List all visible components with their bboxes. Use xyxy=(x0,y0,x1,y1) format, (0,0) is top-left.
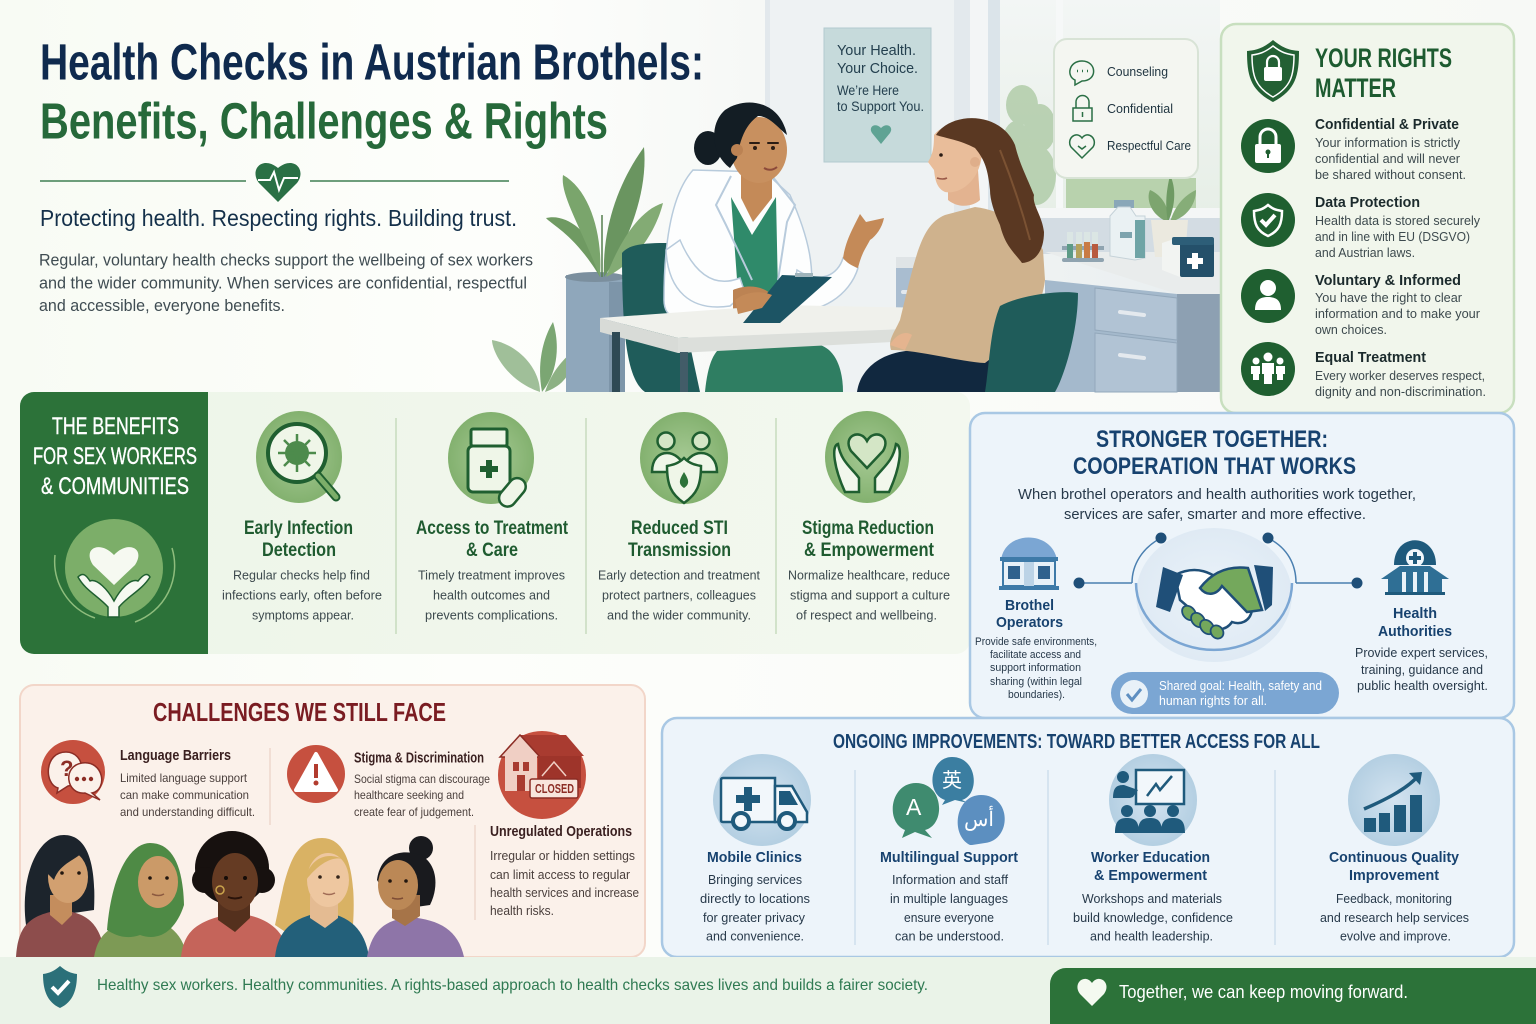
challenge: language barriers: Limited language support xyxy=(120,771,248,785)
challenge: language barriers: Language Barriers xyxy=(120,747,231,764)
challenge: unregulated operations: Unregulated Operations xyxy=(490,823,632,840)
closing banner: Together, we can keep moving forward. xyxy=(1119,982,1408,1002)
footer message: Healthy sex workers. Healthy communities. A rights-based approach to health checks saves lives and builds a fairer society. xyxy=(97,977,928,994)
icon: speech bubbles in three languages: 英 xyxy=(942,769,962,792)
illustration: five diverse women xyxy=(16,831,464,957)
heading: ONGOING IMPROVEMENTS: TOWARD BETTER ACCESS FOR ALL xyxy=(833,731,1320,753)
item: continuous quality improvement: and research help services xyxy=(1320,910,1469,925)
item: multilingual support: Information and staff xyxy=(892,872,1008,887)
item: multilingual support: in multiple languages xyxy=(890,891,1008,906)
intro paragraph: Regular, voluntary health checks support the wellbeing of sex workers xyxy=(39,252,533,270)
actor: brothel operators xyxy=(975,538,1097,701)
item: confidential and private: be shared without consent. xyxy=(1315,167,1466,182)
window xyxy=(954,0,1220,254)
title xyxy=(40,34,704,150)
icon: shield with check xyxy=(43,966,77,1008)
benefit: early infection detection: Regular checks help find xyxy=(233,568,370,582)
item: multilingual support: ensure everyone xyxy=(904,910,994,925)
person: long black hair xyxy=(16,835,106,957)
item: worker education xyxy=(1073,754,1233,944)
panel: ongoing improvements xyxy=(662,718,1514,957)
person: curly hair xyxy=(181,831,289,957)
item: worker education: Workshops and materials xyxy=(1082,891,1222,906)
item: worker education: build knowledge, confidence xyxy=(1073,910,1233,925)
challenge: unregulated operations: Irregular or hidden settings xyxy=(490,848,635,863)
callout: support services: Counseling xyxy=(1107,65,1168,79)
actor: brothel operators: support information xyxy=(990,662,1081,674)
intro: When brothel operators and health authorities work together, xyxy=(1018,487,1416,503)
item: data protection xyxy=(1241,193,1480,260)
patient figure xyxy=(857,118,1045,392)
item: multilingual support xyxy=(880,757,1018,944)
patient chair xyxy=(985,292,1078,392)
actor: health authorities: Provide expert services, xyxy=(1355,645,1488,660)
icon: heart xyxy=(1070,135,1094,158)
floor plant left xyxy=(492,272,625,392)
item: confidential and private: Confidential & Private xyxy=(1315,116,1459,133)
icon: closed building: CLOSED xyxy=(535,782,574,796)
icon: people with shield xyxy=(640,412,728,504)
benefit: access to treatment: prevents complications. xyxy=(425,608,558,622)
poster: We’re Here xyxy=(837,83,899,98)
heading: STRONGER TOGETHER: xyxy=(1096,426,1328,453)
poster: Your Health. xyxy=(837,43,916,59)
counter and cabinets xyxy=(896,252,1220,392)
shared goal pill: human rights for all. xyxy=(1159,694,1267,708)
challenge: stigma and discrimination: create fear of judgement. xyxy=(354,805,474,819)
icon: speech bubbles xyxy=(41,740,105,804)
item: mobile clinics: for greater privacy xyxy=(703,910,805,925)
panel: challenges xyxy=(16,685,645,957)
item: continuous quality improvement: Continuous Quality xyxy=(1329,849,1460,866)
benefit: stigma reduction: stigma and support a culture xyxy=(790,588,950,602)
person: hair bun xyxy=(367,836,464,957)
item: voluntary and informed: information and to make your xyxy=(1315,306,1481,321)
item: multilingual support: Multilingual Support xyxy=(880,849,1018,866)
heading: MATTER xyxy=(1315,73,1396,103)
item: mobile clinics: and convenience. xyxy=(706,928,804,944)
window sill plant xyxy=(1149,175,1196,257)
callout: support services: Respectful Care xyxy=(1107,139,1191,153)
benefit: stigma reduction: Normalize healthcare, reduce xyxy=(788,568,950,582)
benefit: reduced sti transmission: Transmission xyxy=(628,540,731,561)
benefit: access to treatment xyxy=(416,412,569,622)
item: voluntary and informed: You have the right to clear xyxy=(1315,290,1463,305)
item: confidential and private: Your information is strictly xyxy=(1315,135,1460,150)
intro paragraph xyxy=(39,252,533,315)
item: mobile clinics: Mobile Clinics xyxy=(707,849,802,866)
item: data protection: Data Protection xyxy=(1315,194,1420,211)
benefit: early infection detection: Detection xyxy=(262,540,336,561)
item: worker education: Worker Education xyxy=(1091,849,1210,866)
callout: support services xyxy=(1054,39,1198,178)
benefit: stigma reduction: of respect and wellbeing. xyxy=(796,608,937,622)
potted plant leaves xyxy=(546,147,663,277)
benefits sidebar: THE BENEFITS xyxy=(52,413,179,440)
item: equal treatment: Equal Treatment xyxy=(1315,349,1426,366)
connector network xyxy=(1074,532,1362,588)
challenge: stigma and discrimination xyxy=(287,745,490,819)
item: equal treatment: dignity and non-discrimination. xyxy=(1315,384,1486,399)
heading: YOUR RIGHTS xyxy=(1315,43,1452,73)
icon: pill bottle xyxy=(448,412,534,510)
actor: health authorities: Authorities xyxy=(1378,623,1452,640)
icon: heart in hands xyxy=(55,519,175,622)
icon: speech bubbles in three languages: أس xyxy=(964,805,994,831)
actor: brothel operators: boundaries). xyxy=(1008,689,1065,701)
item: voluntary and informed: Voluntary & Informed xyxy=(1315,272,1461,289)
actor: brothel operators: facilitate access and xyxy=(990,649,1081,661)
test tubes and supplies xyxy=(1062,200,1145,262)
item: mobile clinics xyxy=(700,754,811,944)
poster: to Support You. xyxy=(837,99,924,114)
clipboard xyxy=(735,273,832,323)
intro xyxy=(1018,487,1416,523)
benefit: reduced sti transmission: Early detection and treatment xyxy=(598,568,760,582)
item: data protection: Health data is stored securely xyxy=(1315,213,1480,228)
icon: handshake xyxy=(1136,528,1292,662)
challenge: stigma and discrimination: healthcare seeking and xyxy=(354,788,464,802)
heading xyxy=(1073,426,1356,480)
benefit: access to treatment: Timely treatment improves xyxy=(418,568,565,582)
shared goal pill xyxy=(1111,672,1339,714)
item: continuous quality improvement: Feedback, monitoring xyxy=(1336,891,1452,906)
icon: ambulance xyxy=(713,754,811,846)
poster: Your Choice. xyxy=(837,61,918,77)
heading: COOPERATION THAT WORKS xyxy=(1073,453,1356,480)
heart divider xyxy=(40,163,509,202)
benefit: reduced sti transmission: protect partners, colleagues xyxy=(602,588,756,602)
icon: hands and heart xyxy=(825,411,909,503)
intro paragraph: and accessible, everyone benefits. xyxy=(39,297,285,315)
shared goal pill: Shared goal: Health, safety and xyxy=(1159,679,1322,693)
icon: rising bar chart xyxy=(1348,754,1440,846)
icon: counseling xyxy=(1070,61,1094,85)
item: worker education: & Empowerment xyxy=(1094,867,1207,884)
challenge: unregulated operations: health risks. xyxy=(490,903,554,918)
callout: support services: Confidential xyxy=(1107,102,1173,116)
benefit: reduced sti transmission xyxy=(598,412,760,622)
icon: shield with lock xyxy=(1247,40,1299,102)
heading xyxy=(1315,43,1452,103)
actor: health authorities: training, guidance and xyxy=(1361,662,1483,677)
actor: health authorities: Health xyxy=(1393,605,1437,622)
challenge: unregulated operations: can limit access to regular xyxy=(490,867,631,882)
benefit: stigma reduction: & Empowerment xyxy=(804,540,935,561)
benefit: access to treatment: health outcomes and xyxy=(433,588,550,602)
item: continuous quality improvement: Improvement xyxy=(1349,867,1439,884)
item: mobile clinics: Bringing services xyxy=(708,872,802,887)
actor: health authorities xyxy=(1355,540,1488,693)
panel: your rights matter xyxy=(1221,24,1514,413)
item: continuous quality improvement xyxy=(1320,754,1469,944)
icon: speech bubbles in three languages xyxy=(893,757,1005,845)
panel: the benefits xyxy=(20,392,970,654)
challenge: stigma and discrimination: Social stigma can discourage xyxy=(354,772,490,786)
table xyxy=(600,305,930,392)
item: voluntary and informed: own choices. xyxy=(1315,322,1387,337)
actor: health authorities: public health oversight. xyxy=(1357,678,1488,693)
benefit: access to treatment: Access to Treatment xyxy=(416,518,569,539)
item: data protection: and in line with EU (DSGVO) xyxy=(1315,229,1470,244)
benefit: early infection detection xyxy=(222,411,382,622)
benefit: stigma reduction xyxy=(788,411,950,622)
item: mobile clinics: directly to locations xyxy=(700,891,810,906)
doctor figure xyxy=(664,102,884,392)
actor: brothel operators: Provide safe environments, xyxy=(975,636,1097,648)
challenge: unregulated operations xyxy=(490,731,639,918)
benefit: early infection detection: infections early, often before xyxy=(222,588,382,602)
item: worker education: and health leadership. xyxy=(1090,928,1213,944)
doctor chair xyxy=(622,243,700,392)
tagline: Protecting health. Respecting rights. Building trust. xyxy=(40,205,517,231)
challenge: language barriers: and understanding difficult. xyxy=(120,805,255,819)
closing banner xyxy=(1050,968,1536,1024)
item: multilingual support: can be understood. xyxy=(895,928,1004,944)
icon: presenter with audience xyxy=(1109,754,1197,846)
benefit: stigma reduction: Stigma Reduction xyxy=(802,518,934,539)
hero illustration: consultation room xyxy=(492,0,1220,392)
benefit: access to treatment: & Care xyxy=(466,540,518,561)
item: data protection: and Austrian laws. xyxy=(1315,245,1415,260)
icon: closed building xyxy=(498,731,586,819)
actor: brothel operators: sharing (within legal xyxy=(990,676,1082,688)
benefit: early infection detection: symptoms appear. xyxy=(252,608,354,622)
actor: brothel operators: Operators xyxy=(996,614,1063,631)
icon: building xyxy=(999,538,1059,590)
benefit: reduced sti transmission: Reduced STI xyxy=(631,518,728,539)
item: voluntary and informed xyxy=(1241,269,1481,337)
item: continuous quality improvement: evolve and improve. xyxy=(1340,928,1451,944)
title: Health Checks in Austrian Brothels: xyxy=(40,34,704,90)
benefit: early infection detection: Early Infection xyxy=(244,518,353,539)
panel: stronger together xyxy=(970,413,1514,718)
benefits sidebar xyxy=(20,392,208,654)
person: blonde hair xyxy=(275,838,369,957)
footer banner xyxy=(0,957,1536,1024)
actor: brothel operators: Brothel xyxy=(1005,597,1054,614)
challenge: language barriers: can make communication xyxy=(120,788,249,802)
icon: padlock xyxy=(1073,96,1092,121)
icon: warning triangle xyxy=(287,745,345,803)
benefit: reduced sti transmission: and the wider community. xyxy=(607,608,751,622)
intro: services are safer, smarter and more effective. xyxy=(1064,507,1366,523)
intro paragraph: and the wider community. When services are confidential, respectful xyxy=(39,274,527,292)
title: Benefits, Challenges & Rights xyxy=(40,92,608,150)
item: confidential and private xyxy=(1241,116,1466,182)
item: confidential and private: confidential and will never xyxy=(1315,151,1461,166)
heading block xyxy=(39,34,704,315)
challenge: stigma and discrimination: Stigma & Discrimination xyxy=(354,750,484,766)
icon: speech bubbles: ? xyxy=(60,756,73,781)
item: equal treatment xyxy=(1241,342,1486,399)
icon: clinic building xyxy=(1381,540,1449,595)
item: equal treatment: Every worker deserves respect, xyxy=(1315,368,1485,383)
heading: CHALLENGES WE STILL FACE xyxy=(153,697,446,727)
person: green hijab xyxy=(94,843,187,957)
icon: magnifier with virus xyxy=(256,411,342,503)
benefits sidebar: & COMMUNITIES xyxy=(41,473,189,500)
challenge: unregulated operations: health services and increase xyxy=(490,885,639,900)
first aid box xyxy=(1162,237,1214,277)
poster xyxy=(824,28,931,162)
benefits sidebar: FOR SEX WORKERS xyxy=(33,443,197,470)
icon: speech bubbles in three languages: A xyxy=(906,794,922,820)
challenge: language barriers xyxy=(41,740,255,819)
